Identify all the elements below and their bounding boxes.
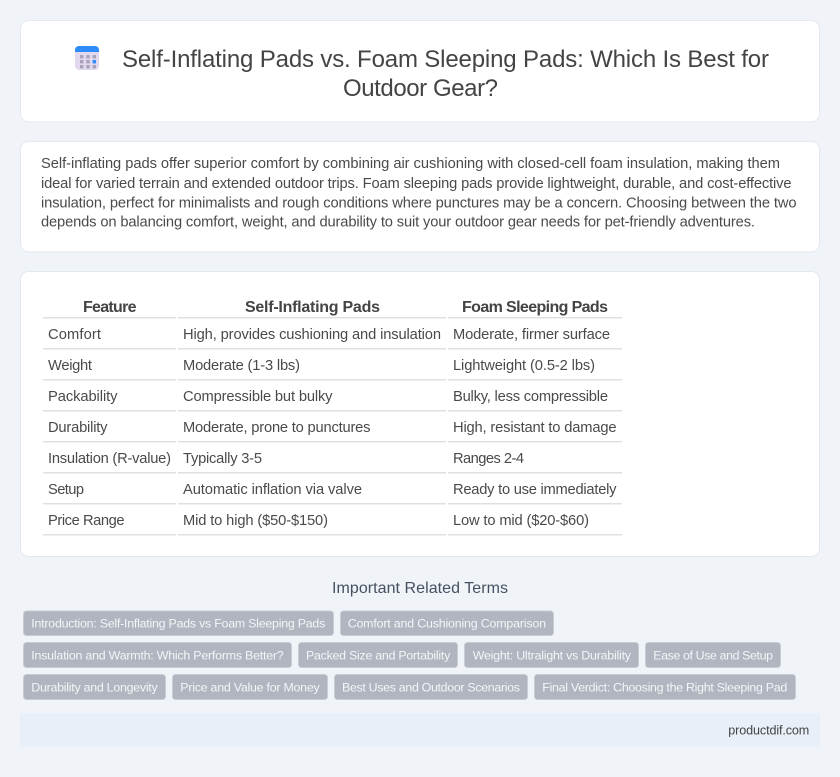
row: weight xyxy=(43,358,622,380)
tag: best uses xyxy=(334,674,528,700)
table header row: Foam Sleeping Pads xyxy=(462,299,608,316)
row: setup: Ready to use immediately xyxy=(453,482,617,498)
tag: insulation: Insulation and Warmth: Which Performs Better? xyxy=(31,648,284,662)
panel: introduction text xyxy=(20,142,820,252)
intro paragraph: insulation, perfect for minimalists and rough conditions where punctures may be a concern. Choosing between the two xyxy=(41,196,796,212)
tag: packed size: Packed Size and Portability xyxy=(306,648,451,662)
intro paragraph xyxy=(41,156,796,230)
table header row: Feature xyxy=(83,299,137,316)
row: packability: Compressible but bulky xyxy=(183,389,333,405)
row: durability: Moderate, prone to punctures xyxy=(183,420,370,436)
icon: calendar xyxy=(75,46,99,70)
row: insulation: Typically 3-5 xyxy=(183,451,262,467)
row: durability xyxy=(43,420,622,442)
row: packability: Bulky, less compressible xyxy=(453,389,608,405)
tag: introduction: Introduction: Self-Inflating Pads vs Foam Sleeping Pads xyxy=(31,616,325,630)
row: price range: Low to mid ($20-$60) xyxy=(453,513,589,529)
tag: final verdict: Final Verdict: Choosing the Right Sleeping Pad xyxy=(542,680,787,694)
panel: title header xyxy=(20,20,820,122)
row: weight: Weight xyxy=(48,358,92,374)
heading: important related terms: Important Related Terms xyxy=(332,580,508,597)
intro paragraph: depends on balancing comfort, weight, and durability to suit your outdoor gear needs for pet-friendly adventures. xyxy=(41,214,755,230)
footer xyxy=(20,713,820,747)
row: comfort: High, provides cushioning and insulation xyxy=(183,327,441,343)
tag: weight xyxy=(464,642,638,668)
row: setup: Automatic inflation via valve xyxy=(183,482,362,498)
tag: best uses: Best Uses and Outdoor Scenarios xyxy=(342,680,520,694)
tag: packed size xyxy=(298,642,458,668)
row: packability: Packability xyxy=(48,389,118,405)
intro paragraph: ideal for varied terrain and extended outdoor trips. Foam sleeping pads provide lightweight, durable, and cost-effective xyxy=(41,176,792,192)
tag: price xyxy=(172,674,328,700)
row: comfort: Moderate, firmer surface xyxy=(453,327,610,343)
row: comfort: Comfort xyxy=(48,327,101,343)
row: price range: Price Range xyxy=(48,513,124,529)
tag: ease of use xyxy=(646,642,780,668)
row: weight: Moderate (1-3 lbs) xyxy=(183,358,300,374)
row: insulation: Ranges 2-4 xyxy=(453,451,524,467)
title: Self-Inflating Pads vs. Foam Sleeping Pads: Which Is Best for xyxy=(122,46,769,73)
tag: durability xyxy=(24,674,166,700)
row: packability xyxy=(43,389,622,412)
panel: comparison table xyxy=(20,272,820,556)
row: weight: Lightweight (0.5-2 lbs) xyxy=(453,358,595,374)
table header row xyxy=(43,299,622,318)
tag: price: Price and Value for Money xyxy=(180,680,320,694)
tag: weight: Weight: Ultralight vs Durability xyxy=(473,648,632,662)
row: price range: Mid to high ($50-$150) xyxy=(183,513,328,529)
tag: final verdict xyxy=(534,674,796,700)
row: insulation: Insulation (R-value) xyxy=(48,451,171,467)
tag: introduction xyxy=(24,611,334,636)
row: insulation xyxy=(43,451,622,474)
tag: durability: Durability and Longevity xyxy=(31,680,158,694)
intro paragraph: Self-inflating pads offer superior comfort by combining air cushioning with closed-cell foam insulation, making them xyxy=(41,156,780,172)
row: setup: Setup xyxy=(48,482,84,498)
title xyxy=(122,46,769,102)
related terms tags xyxy=(24,611,796,700)
row: durability: Durability xyxy=(48,420,108,436)
table header row: Self-Inflating Pads xyxy=(245,299,380,316)
row: setup xyxy=(43,482,622,504)
tag: insulation xyxy=(24,642,292,668)
row: durability: High, resistant to damage xyxy=(453,420,616,436)
tag: comfort: Comfort and Cushioning Comparison xyxy=(348,616,546,630)
row: comfort xyxy=(43,327,622,350)
tag: ease of use: Ease of Use and Setup xyxy=(653,648,773,662)
title: Outdoor Gear? xyxy=(343,75,498,102)
row: price range xyxy=(43,513,622,536)
footer: productdif.com xyxy=(728,724,809,738)
tag: comfort xyxy=(340,611,554,636)
